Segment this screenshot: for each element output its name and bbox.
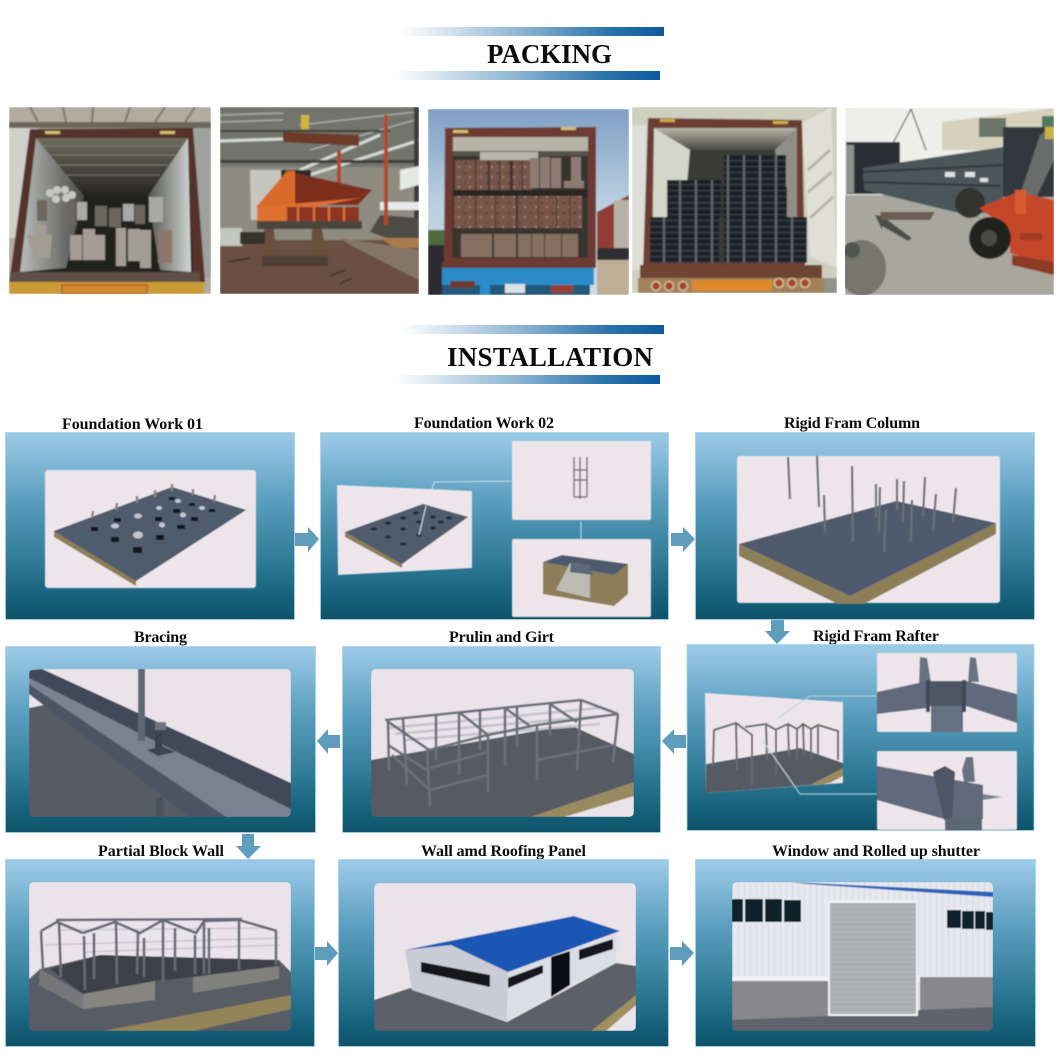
illustration: purlin and girt frame bbox=[371, 669, 634, 817]
heading: INSTALLATION: INSTALLATION bbox=[447, 342, 654, 372]
illustration: eave connection card bbox=[877, 751, 1017, 830]
panel background bbox=[338, 860, 668, 1046]
title: Partial Block Wall: Partial Block Wall bbox=[98, 843, 225, 860]
illustration: clad building with blue roof bbox=[374, 883, 636, 1031]
panel background bbox=[696, 432, 1034, 620]
panel: Foundation Work 01 bbox=[6, 416, 294, 620]
arrow: panel 3 to panel 6 bbox=[765, 620, 790, 644]
photo: container with red-brown plate stacks on blue truck bbox=[428, 109, 629, 295]
panel: Window and Rolled up shutter bbox=[696, 843, 1036, 1046]
panel: Wall amd Roofing Panel bbox=[338, 843, 668, 1046]
panel: Foundation Work 02 bbox=[320, 415, 668, 620]
illustration: building facade with shutter door bbox=[732, 882, 993, 1031]
panel background bbox=[687, 644, 1034, 830]
panel background bbox=[6, 646, 316, 832]
illustration: columns standing on slab bbox=[737, 456, 1000, 604]
title: Rigid Fram Column: Rigid Fram Column bbox=[784, 415, 920, 432]
panel background bbox=[320, 432, 668, 620]
illustration: rebar cage card bbox=[512, 441, 651, 520]
illustration: bracing close-up on beam bbox=[29, 669, 291, 817]
arrow: panel 8 to panel 9 bbox=[670, 941, 694, 966]
heading: PACKING: PACKING bbox=[487, 39, 612, 69]
panel: Rigid Fram Column bbox=[696, 415, 1034, 620]
title: Window and Rolled up shutter: Window and Rolled up shutter bbox=[772, 843, 980, 860]
photo: open container with steel plates and tubes bbox=[9, 107, 211, 294]
heading: INSTALLATION bbox=[392, 325, 664, 384]
illustration: ridge connection card bbox=[877, 653, 1017, 732]
title: Bracing: Bracing bbox=[134, 629, 187, 646]
title: Foundation Work 02: Foundation Work 02 bbox=[414, 415, 554, 432]
photo: orange steel beams on crane lift bbox=[220, 107, 420, 294]
arrow: panel 7 to panel 8 bbox=[315, 941, 338, 966]
arrow: panel 5 to panel 4 bbox=[317, 729, 340, 754]
illustration: rafter frames on skewed card bbox=[705, 693, 877, 794]
panel: Bracing bbox=[6, 629, 316, 832]
heading: PACKING bbox=[392, 27, 664, 80]
title: Rigid Fram Rafter: Rigid Fram Rafter bbox=[813, 628, 939, 645]
photo: container with dark stacked purlins bbox=[632, 107, 837, 293]
illustration: slab on skewed card bbox=[337, 481, 581, 575]
arrow: panel 1 to panel 2 bbox=[295, 527, 319, 552]
arrow: panel 2 to panel 3 bbox=[671, 527, 695, 552]
illustration: foundation pit section card bbox=[512, 539, 651, 617]
title: Prulin and Girt: Prulin and Girt bbox=[449, 629, 555, 646]
panel background bbox=[6, 432, 294, 620]
panel background bbox=[6, 860, 314, 1046]
panel: Partial Block Wall bbox=[6, 843, 314, 1046]
arrow: panel 4 to panel 7 bbox=[236, 834, 261, 859]
panel background bbox=[696, 860, 1036, 1046]
illustration: block walls with frame bbox=[29, 882, 291, 1031]
panel: Rigid Fram Rafter bbox=[687, 628, 1034, 830]
title: Wall amd Roofing Panel: Wall amd Roofing Panel bbox=[421, 843, 587, 860]
panel background bbox=[342, 646, 660, 832]
arrow: panel 6 to panel 5 bbox=[662, 729, 686, 754]
photo: forklift carrying steel frame bbox=[838, 108, 1054, 296]
title: Foundation Work 01: Foundation Work 01 bbox=[62, 416, 203, 433]
panel: Prulin and Girt bbox=[342, 629, 660, 832]
illustration: slab with foundation holes bbox=[45, 470, 256, 588]
